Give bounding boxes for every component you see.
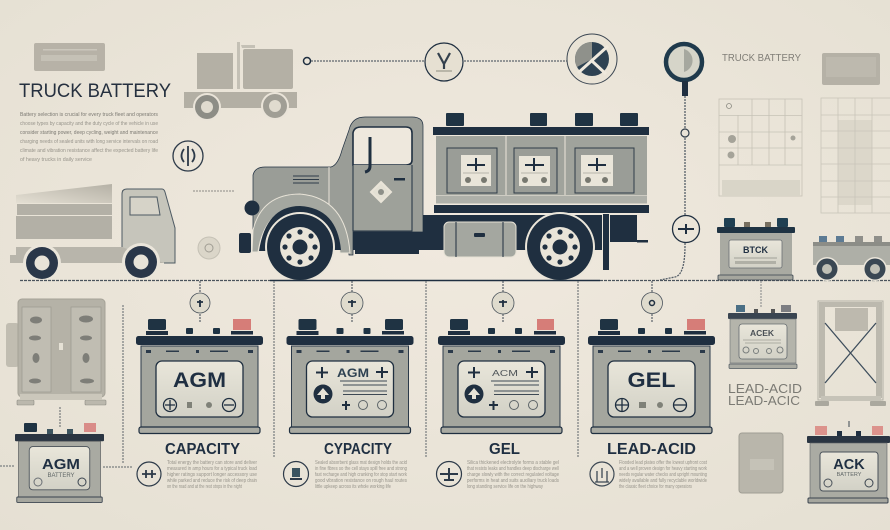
connector circle 3 (492, 281, 514, 322)
icon: top circle (425, 43, 463, 81)
top connector line (304, 58, 567, 64)
capacity text (166, 460, 257, 490)
caption: gel: GEL (489, 441, 520, 458)
lead-acid text: and a well proven design for heavy starting work (619, 466, 707, 472)
small battery: AGM (15, 423, 104, 502)
icon: capacity (137, 462, 161, 486)
gel text: long standing service life on the highway (467, 484, 543, 490)
intro text block: consider starting power, deep cycling, weight and maintenance (20, 130, 158, 136)
main horizontal connector (0, 280, 890, 467)
cypacity text: good vibration resistance on rough haul routes (315, 478, 407, 484)
lead-acid text: the classic fleet choice for many operators (619, 484, 692, 490)
intro text block: choose types by capacity and the duty cycle of the vehicle in use (20, 121, 158, 127)
small battery: AGM: AGM (42, 457, 80, 473)
connector circle 1 (190, 281, 210, 322)
cypacity text (315, 460, 407, 490)
cypacity text: fast recharge and high cranking for stop start work (315, 472, 407, 478)
title: TRUCK BATTERY (19, 80, 171, 102)
battery: GEL (588, 319, 715, 434)
icon: gauge with connector (660, 44, 702, 280)
cypacity text: little upkeep across its whole working life (315, 484, 391, 490)
battery: AGM with list: AGM (337, 368, 369, 380)
icon: left circle (173, 141, 203, 171)
battery: AGM (136, 319, 263, 434)
stand frame (815, 301, 886, 406)
connector circle 4 (642, 281, 662, 322)
battery: GEL: GEL (628, 369, 676, 392)
top left tag (34, 43, 105, 71)
battery: mixed label: ACM (492, 369, 518, 378)
capacity text: while parked and reduce the risk of deep drain (166, 478, 257, 484)
icon: lead-acid (590, 462, 614, 486)
capacity text: on the road and at the rest stops in the night (167, 484, 242, 490)
gel text (467, 460, 559, 490)
icon: cypacity (284, 462, 308, 486)
label: lead-acid pair: LEAD-ACID (728, 381, 802, 396)
icon: gel (436, 462, 462, 486)
right faded table 2 (821, 98, 890, 213)
small battery: ACK: BATTERY (837, 472, 862, 478)
intro text block: Battery selection is crucial for every truck fleet and operators (20, 112, 158, 118)
faded panel (739, 433, 783, 493)
left control panel (6, 299, 106, 405)
chassis (351, 215, 602, 250)
fender and wheels (252, 194, 350, 253)
caption: cypacity: CYPACITY (324, 441, 393, 458)
small battery: ACEK (728, 281, 797, 368)
icon: pie chart (567, 34, 617, 84)
right cart (813, 236, 890, 281)
battery: mixed label (438, 319, 565, 434)
caption: capacity: CAPACITY (165, 441, 241, 458)
gel text: performs in heat and suits auxiliary truck loads (467, 478, 559, 484)
label: lead-acid pair (728, 381, 802, 408)
lead-acid text: widely available and fully recyclable worldwide (618, 478, 707, 484)
small battery: BTCK (717, 218, 795, 280)
right heading: TRUCK BATTERY (722, 52, 801, 64)
label: lead-acid pair: LEAD-ACIC (728, 393, 800, 408)
intro text block: climate and vibration resistance affect the expected battery life (20, 148, 158, 154)
cab (253, 117, 423, 255)
small medallion (193, 191, 234, 259)
cypacity text: Sealed absorbent glass mat design holds the acid (315, 460, 407, 466)
left faded truck (10, 184, 175, 282)
gel text: that resists leaks and handles deep discharge well (467, 466, 559, 472)
lead-acid text (618, 460, 707, 490)
intro text block: charging needs of sealed units with long service intervals on road (20, 139, 158, 145)
capacity text: measured in amp hours for a typical truck load (167, 466, 257, 472)
cypacity text: in fine fibres so the cell stays spill free and strong (315, 466, 407, 472)
small battery: ACK: ACK (833, 457, 865, 473)
capacity text: Total energy the battery can store and deliver (167, 460, 257, 466)
truck cargo battery (433, 113, 649, 213)
lead-acid text: Flooded lead plates offer the lowest upfront cost (619, 460, 707, 466)
right faded table 1 (719, 99, 802, 196)
battery: AGM: AGM (173, 369, 226, 392)
connector circle 2 (341, 281, 363, 322)
small battery: ACK (807, 421, 890, 503)
gel text: charge slowly with the correct regulated voltage (467, 472, 559, 478)
right tag (822, 53, 880, 85)
small battery: AGM: BATTERY (47, 473, 75, 479)
side tank (444, 222, 516, 257)
gel text: Silica thickened electrolyte forms a stable gel (467, 460, 559, 466)
main truck (239, 113, 649, 282)
battery: AGM with list (286, 319, 414, 434)
capacity text: higher ratings support longer accessory use (167, 472, 257, 478)
top faded truck (184, 42, 297, 121)
lead-acid text: needs regular water checks and upright mounting (619, 472, 707, 478)
intro text block (20, 112, 158, 163)
caption: lead-acid: LEAD-ACID (607, 441, 696, 458)
small battery: BTCK: BTCK (743, 245, 768, 255)
intro text block: of heavy trucks in daily service (20, 157, 92, 163)
small battery: ACEK: ACEK (750, 328, 775, 338)
